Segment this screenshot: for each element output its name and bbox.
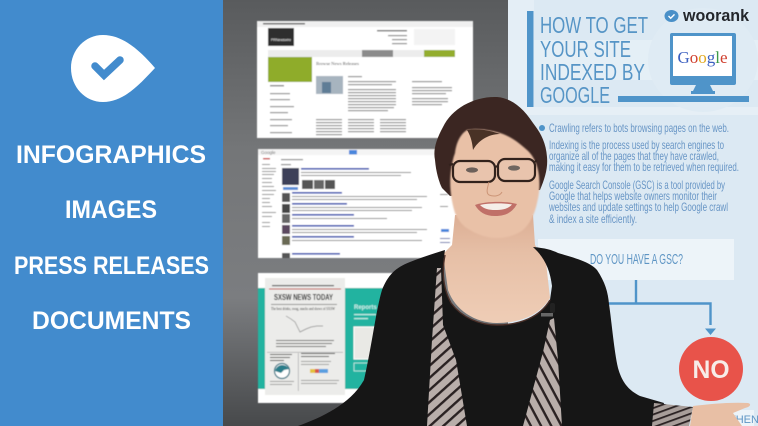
presenter [298,97,750,426]
infographic title: INDEXED BY [540,59,645,85]
glasses [449,159,537,182]
infographic title: GOOGLE [540,82,610,108]
hand and cuff [652,403,750,426]
grey backdrop [223,0,513,426]
title accent bar [527,11,534,107]
no circle: NO [692,356,730,384]
bullet [539,125,545,131]
body copy [548,121,739,226]
result thumbnails [282,168,335,258]
woorank logo: woorank [682,6,750,25]
result lines [292,168,369,255]
mouth [475,202,517,216]
hair back [434,97,547,196]
body copy: & index a site efficiently. [549,212,637,226]
logo block: PRNewswire [271,38,291,42]
icon: monitor with Google logo: Google [677,48,728,67]
neck and chest [443,215,550,323]
category labels: IMAGES [65,196,157,224]
reports text: Reports [354,305,377,311]
category labels [14,141,209,335]
icon: monitor with Google logo [670,33,736,94]
hair strands over forehead [467,129,500,150]
icon: teardrop check mark [71,35,155,102]
cardigan and top [298,247,664,426]
nose shadow [487,182,502,196]
question box [538,239,734,280]
neckline trim [443,255,550,325]
striped lining right [523,318,562,426]
category labels: DOCUMENTS [32,307,191,335]
newspaper page: SXSW NEWS TODAY [274,292,333,302]
panel: Google news results page: Google [261,150,276,155]
category labels: PRESS RELEASES [14,252,209,280]
newspaper page [265,278,345,395]
microphone [541,303,555,316]
face [450,129,539,238]
panel: SXSW news document [258,273,408,403]
news photo [316,76,343,94]
infographic title: YOUR SITE [540,36,631,62]
panel: how to get indexed infographic [508,0,758,426]
panel: blue category list [0,0,223,426]
arrow: question to no [605,280,716,335]
logo block [268,28,294,46]
no circle [679,337,743,401]
striped lining left [427,268,467,426]
question box: DO YOU HAVE A GSC? [590,251,683,268]
heading: Browse News Releases [316,61,359,66]
panel: press release web page [257,21,473,138]
infographic title [540,12,648,108]
sidebar links [262,164,276,227]
newspaper page: The best drinks, swag, snacks and shows of SXSW [271,307,336,312]
infographic title: HOW TO GET [540,12,648,38]
panel: Google news results page [258,149,463,258]
report preview [354,327,384,359]
category labels: INFOGRAPHICS [16,141,206,169]
eyes [466,165,520,173]
